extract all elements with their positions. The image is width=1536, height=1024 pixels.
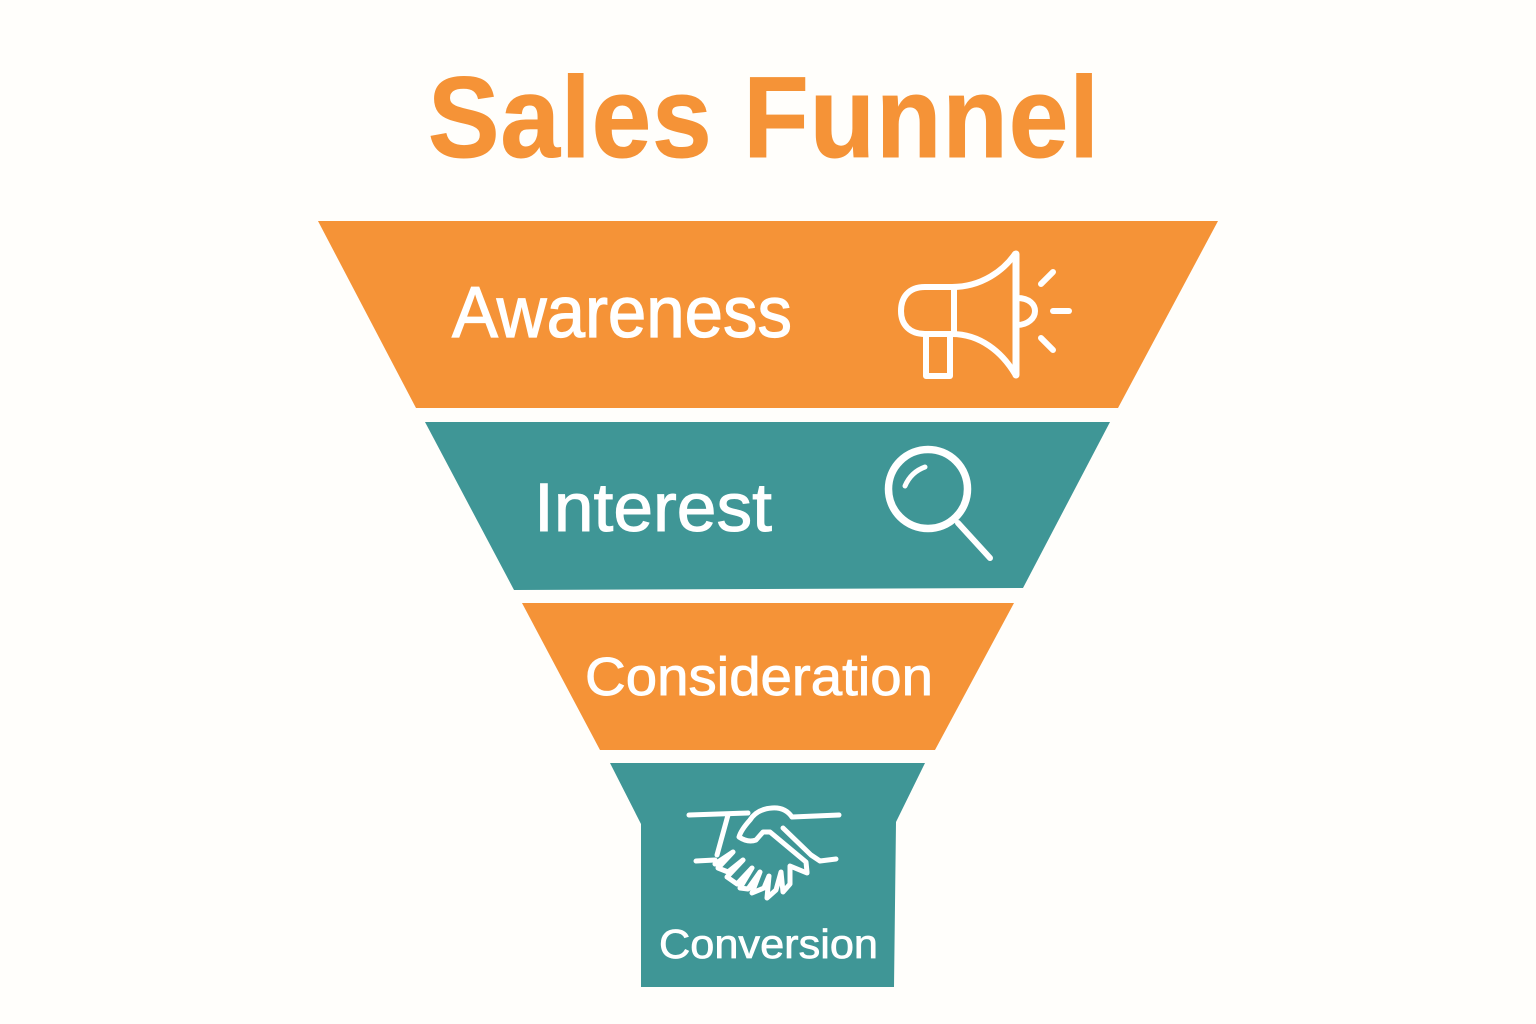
interest band	[425, 422, 1110, 590]
panel: conversion	[610, 763, 925, 987]
icon: magnifying glass	[888, 450, 990, 558]
awareness label: Awareness	[452, 273, 792, 353]
panel: consideration	[522, 603, 1014, 750]
conversion label: Conversion	[659, 921, 878, 967]
consideration band	[522, 603, 1014, 750]
icon: handshake	[689, 808, 839, 898]
consideration label: Consideration	[585, 647, 933, 707]
panel: awareness	[318, 221, 1218, 408]
icon: megaphone	[901, 254, 1069, 376]
title: Sales Funnel	[428, 54, 1100, 182]
interest label: Interest	[534, 469, 772, 546]
panel: interest	[425, 422, 1110, 590]
conversion band	[610, 763, 925, 987]
awareness band	[318, 221, 1218, 408]
